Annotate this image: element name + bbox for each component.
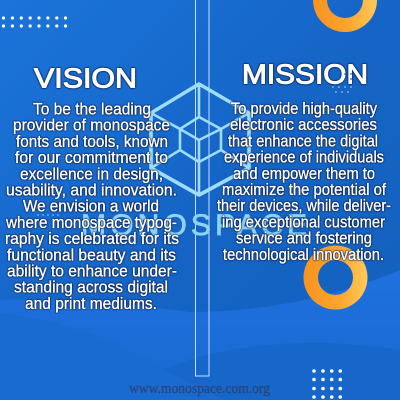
text block: vision: for our commitment to	[15, 149, 168, 167]
text block: vision: To be the leading	[33, 100, 151, 118]
text block: vision	[5, 100, 179, 313]
text block: mission: technological innovation.	[223, 246, 384, 264]
text block: mission: experience of individuals	[224, 149, 384, 167]
text block: mission: To provide high-quality	[231, 100, 378, 118]
text block: vision: usability, and innovation.	[6, 182, 177, 200]
text block: vision: ability to enhance under-	[7, 262, 177, 280]
text block: mission: that enhance the digital	[228, 132, 378, 150]
text block: mission: and empower them to	[233, 165, 375, 183]
text block: mission: electronic accessories	[230, 116, 377, 134]
watermark wordmark: MONOSPACE	[81, 209, 307, 242]
text block: vision: standing across digital	[14, 279, 168, 297]
decorative dots top left	[2, 16, 67, 28]
text block: mission: service and fostering	[236, 230, 372, 248]
text block: vision: and print mediums.	[25, 295, 157, 313]
orange ring top right	[313, 0, 377, 32]
text block: vision: excellence in design,	[20, 165, 163, 183]
watermark cube logo	[151, 84, 249, 195]
heading: vision: VISION	[34, 62, 137, 94]
text block: vision: raphy is celebrated for its	[5, 230, 179, 248]
orange ring lower right	[304, 246, 368, 310]
heading: mission: MISSION	[242, 58, 368, 90]
text block: mission	[217, 100, 391, 264]
text block: mission: maximize the potential of	[222, 181, 386, 199]
faint dots behind vision text	[37, 214, 59, 216]
decorative dots bottom right	[312, 369, 342, 399]
vertical frame	[196, 0, 209, 376]
text block: vision: where monospace typog-	[5, 214, 177, 232]
footer url: www.monospace.com.org	[129, 381, 270, 397]
text block: vision: provider of monospace	[13, 117, 170, 135]
text block: vision: fonts and tools, known	[16, 133, 168, 151]
text block: vision: functional beauty and its	[7, 246, 176, 264]
faint dots over mission heading	[332, 73, 352, 93]
text block: vision: We envision a world	[23, 198, 159, 216]
text block: mission: ing exceptional customer	[222, 213, 385, 231]
